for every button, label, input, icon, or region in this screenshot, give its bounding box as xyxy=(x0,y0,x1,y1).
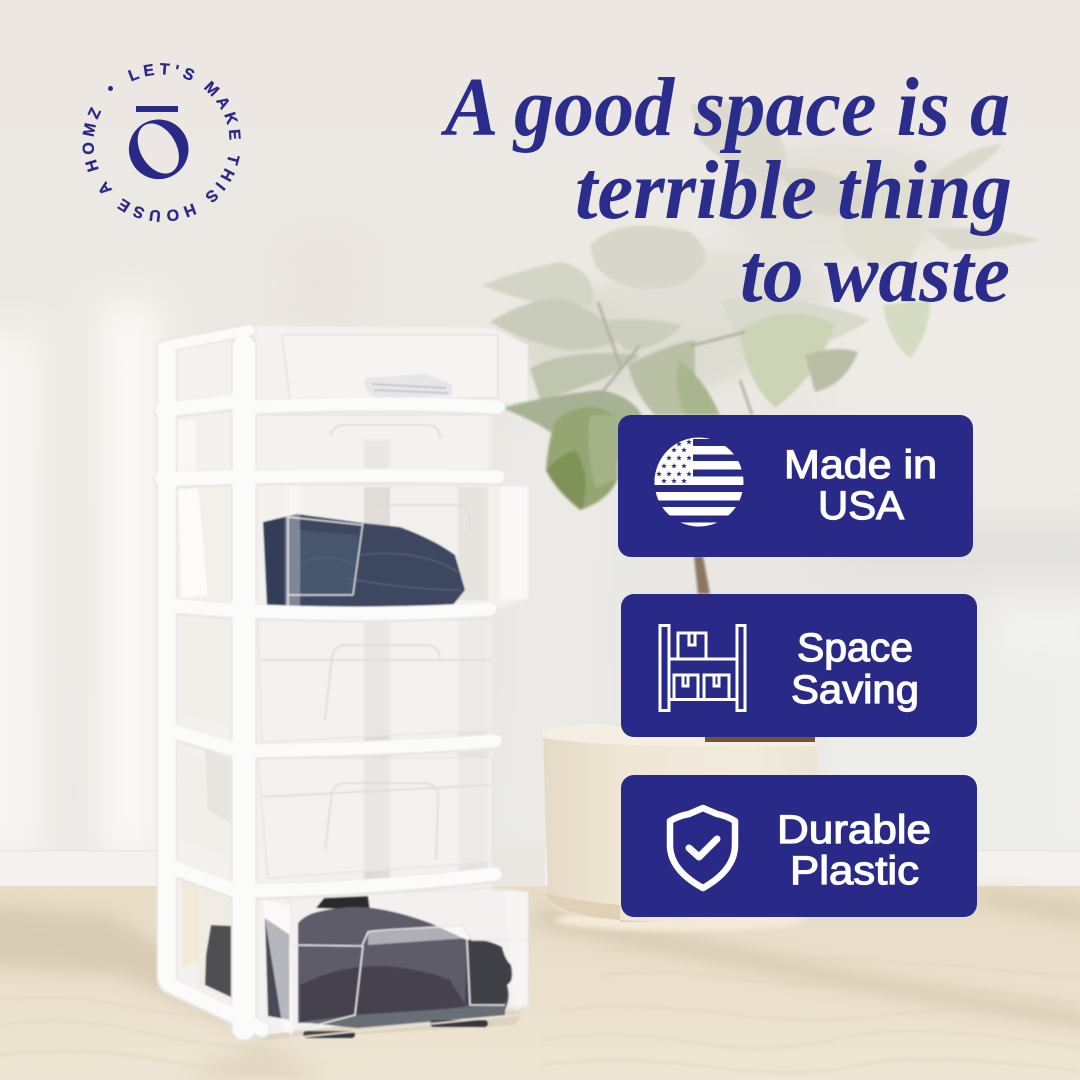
headline line three: to waste xyxy=(740,227,1010,320)
label: durable plastic: Durable xyxy=(777,808,931,852)
top lid xyxy=(157,326,528,418)
logo ring dot xyxy=(108,86,113,91)
plant stem xyxy=(694,556,710,594)
top drawer xyxy=(282,335,498,400)
headline line two: terrible thing xyxy=(575,144,1012,237)
icon: shield with check xyxy=(670,808,735,888)
label: made in USA: Made in xyxy=(784,443,937,487)
dark back side xyxy=(265,918,290,1020)
drawer fronts xyxy=(250,415,492,878)
drawer three interior xyxy=(258,485,528,608)
logo: circular badge xyxy=(82,63,241,222)
label: made in USA xyxy=(784,443,937,528)
headline line one: A good space is a xyxy=(440,61,1010,154)
front dark leaf xyxy=(546,407,618,510)
black gap xyxy=(316,896,370,910)
jeans xyxy=(263,514,465,607)
plant xyxy=(482,102,1040,594)
panel: made in USA xyxy=(618,415,973,557)
drawer handles xyxy=(260,425,490,860)
middle leaves xyxy=(502,302,858,462)
folded cloth xyxy=(365,374,452,398)
logo bar xyxy=(136,106,178,112)
baseboard xyxy=(0,850,1080,887)
icon: US flag xyxy=(654,438,744,526)
label: space saving: Saving xyxy=(791,668,919,712)
back posts xyxy=(364,440,488,890)
panel: space saving xyxy=(621,594,977,737)
label: durable plastic: Plastic xyxy=(790,849,919,893)
label: made in USA: USA xyxy=(818,484,904,528)
floor shadow xyxy=(160,985,525,1040)
wheels xyxy=(303,1031,355,1038)
logo letter o xyxy=(129,116,188,181)
panel: durable plastic xyxy=(621,775,977,917)
drawer body xyxy=(290,888,528,1038)
label: space saving xyxy=(791,626,919,712)
side clothes window xyxy=(205,925,233,998)
icon: shelf with boxes xyxy=(660,626,745,710)
side and back body xyxy=(158,345,528,1035)
open drawer six with clothes xyxy=(205,888,528,1038)
open drawer three with jeans xyxy=(258,485,528,610)
logo ring text: LET'S MAKE THIS HOUSE A HOMZ xyxy=(82,63,241,222)
label: space saving: Space xyxy=(797,626,913,670)
plant pot xyxy=(543,724,817,931)
drawer unit product xyxy=(157,326,528,1040)
white frame posts and rails xyxy=(162,330,498,1030)
label: durable plastic xyxy=(777,808,931,893)
see-through left side openings xyxy=(178,355,233,1000)
headline xyxy=(440,61,1012,320)
floor xyxy=(0,886,1080,1080)
plant haze xyxy=(510,140,960,395)
faded upper leaves xyxy=(482,102,1040,358)
clothes xyxy=(298,907,512,1023)
